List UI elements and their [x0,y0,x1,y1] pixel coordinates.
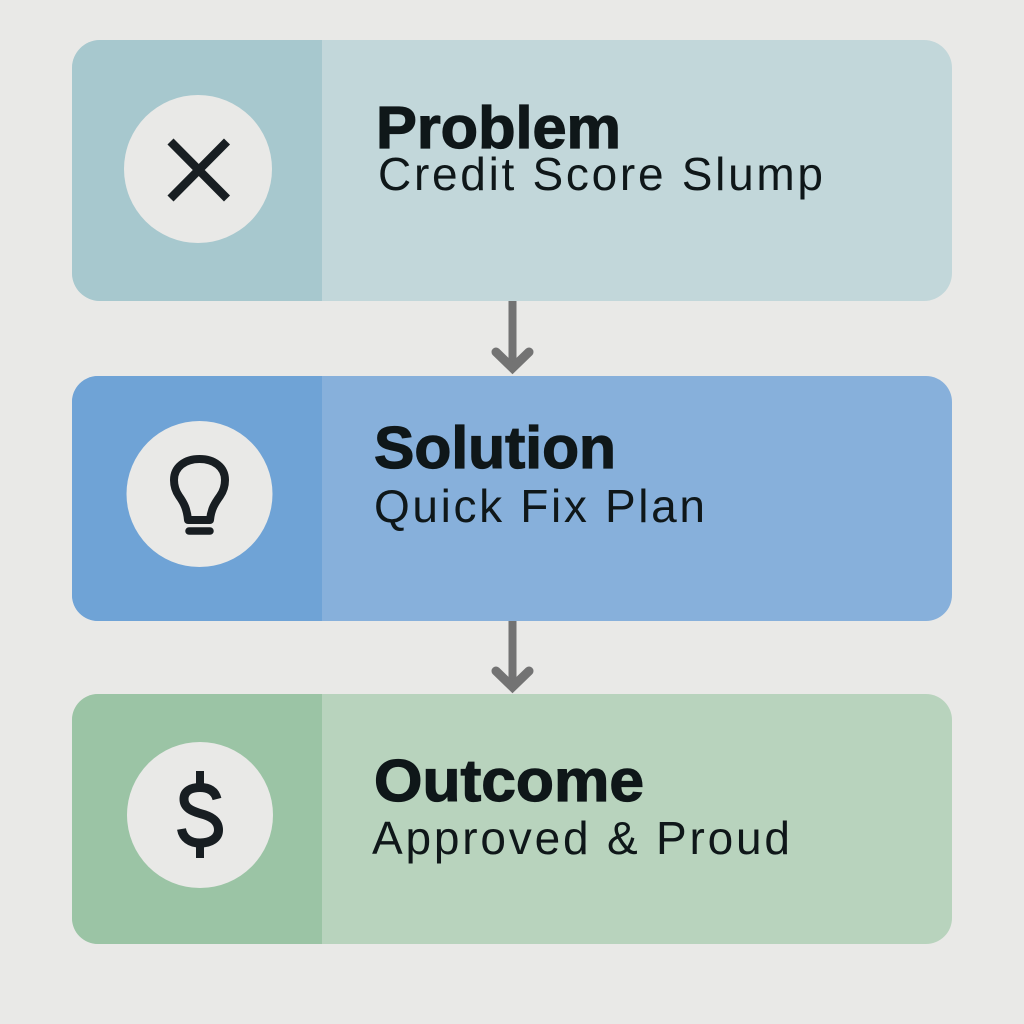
problem icon column [72,40,322,301]
outcome subheading: Approved & Proud [372,812,790,864]
solution subheading: Quick Fix Plan [374,480,705,532]
outcome icon column [72,694,322,944]
outcome heading: Outcome [374,748,644,814]
arrow: solution to outcome [496,621,529,687]
problem icon circle [124,95,272,243]
outcome icon circle [127,742,273,888]
solution icon circle [126,421,272,567]
problem heading: Problem [376,95,621,161]
solution icon column [72,376,322,621]
panel: outcome [72,694,952,944]
panel: solution [72,376,952,621]
icon: dollar sign [182,771,218,858]
icon: cross [170,142,227,198]
arrow: problem to solution [496,301,529,368]
problem subheading: Credit Score Slump [378,148,823,200]
icon: light bulb [174,459,225,531]
panel: problem [72,40,952,301]
solution heading: Solution [374,415,616,481]
